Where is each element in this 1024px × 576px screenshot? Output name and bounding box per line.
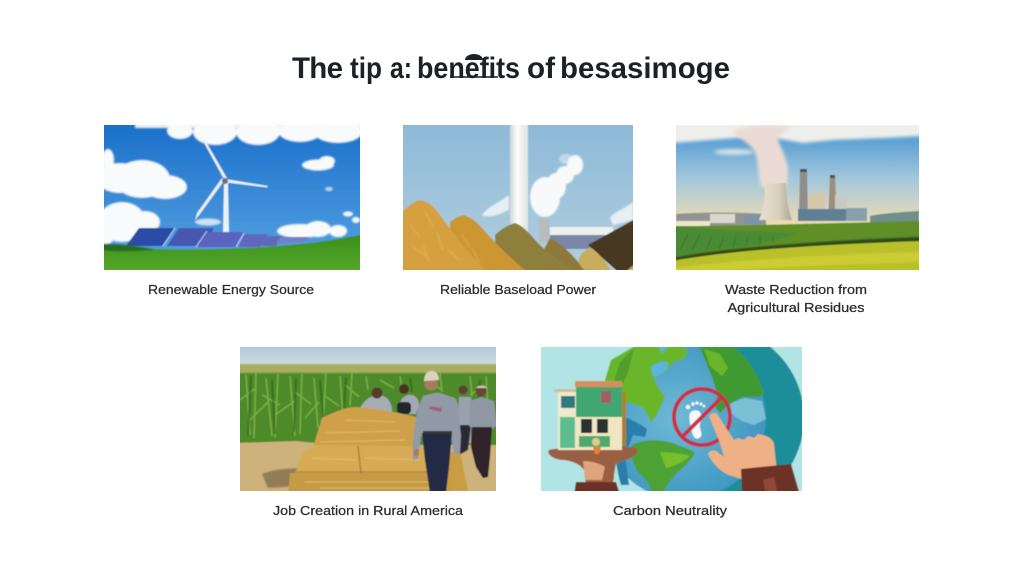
small buildings bbox=[710, 214, 735, 223]
high clouds bbox=[672, 121, 923, 155]
panel: renewable energy source bbox=[104, 125, 360, 270]
label: renewable energy source: Renewable Energy Source bbox=[148, 282, 314, 297]
green field bbox=[676, 220, 919, 259]
dark crop edge bbox=[676, 236, 919, 261]
stacks and plant bbox=[799, 169, 808, 215]
grass bbox=[104, 234, 360, 270]
plant building bbox=[539, 218, 549, 242]
title bbox=[292, 52, 730, 85]
label: waste reduction from agricultural residues: Agricultural Residues bbox=[728, 300, 865, 315]
title: benefits bbox=[417, 52, 520, 85]
panel: job creation in rural america bbox=[236, 343, 500, 495]
continents bbox=[605, 343, 766, 495]
hand holding house bbox=[548, 447, 638, 495]
pointing hand bbox=[708, 413, 800, 495]
turbine bbox=[195, 140, 268, 234]
panel: reliable baseload power bbox=[399, 121, 637, 274]
corn field bbox=[236, 367, 500, 447]
yellow field bbox=[676, 240, 919, 270]
title: a: bbox=[390, 52, 412, 85]
label: waste reduction from agricultural residues bbox=[725, 282, 867, 315]
ground bbox=[236, 441, 500, 495]
clouds bbox=[104, 125, 360, 246]
label: waste reduction from agricultural residues: Waste Reduction from bbox=[725, 282, 867, 297]
label: carbon neutrality: Carbon Neutrality bbox=[613, 503, 728, 518]
globe shadow disc bbox=[720, 347, 802, 491]
distant hills bbox=[676, 212, 766, 226]
title: tip bbox=[350, 52, 382, 85]
hay bales bbox=[288, 407, 468, 495]
globe bbox=[616, 347, 766, 491]
photo: power plant over fields bbox=[672, 121, 923, 274]
label: reliable baseload power: Reliable Baseload Power bbox=[440, 282, 597, 297]
steam plume bbox=[733, 125, 793, 188]
title: The bbox=[292, 52, 343, 85]
footprint bbox=[686, 401, 705, 439]
title: of bbox=[527, 52, 555, 85]
back workers bbox=[360, 384, 474, 455]
panel: waste reduction from agricultural residues bbox=[672, 121, 923, 274]
main worker bbox=[413, 371, 461, 493]
label: job creation in rural america: Job Creation in Rural America bbox=[273, 503, 464, 518]
house bbox=[554, 381, 626, 454]
panel: carbon neutrality bbox=[541, 347, 802, 491]
photo: wind turbine and solar panels bbox=[104, 125, 360, 270]
piles bbox=[588, 220, 633, 270]
solar panels bbox=[126, 228, 310, 247]
chimney bbox=[510, 121, 528, 233]
no-footprint sign bbox=[674, 389, 730, 445]
illustration: globe, house and no-footprint sign bbox=[541, 347, 802, 491]
smoke plumes bbox=[482, 154, 633, 225]
title: besasimoge bbox=[560, 52, 730, 85]
cooling tower bbox=[759, 183, 792, 220]
right worker bbox=[469, 386, 497, 478]
photo: biomass piles and chimney bbox=[399, 121, 637, 274]
photo: workers with hay bales in a corn field bbox=[236, 343, 500, 495]
